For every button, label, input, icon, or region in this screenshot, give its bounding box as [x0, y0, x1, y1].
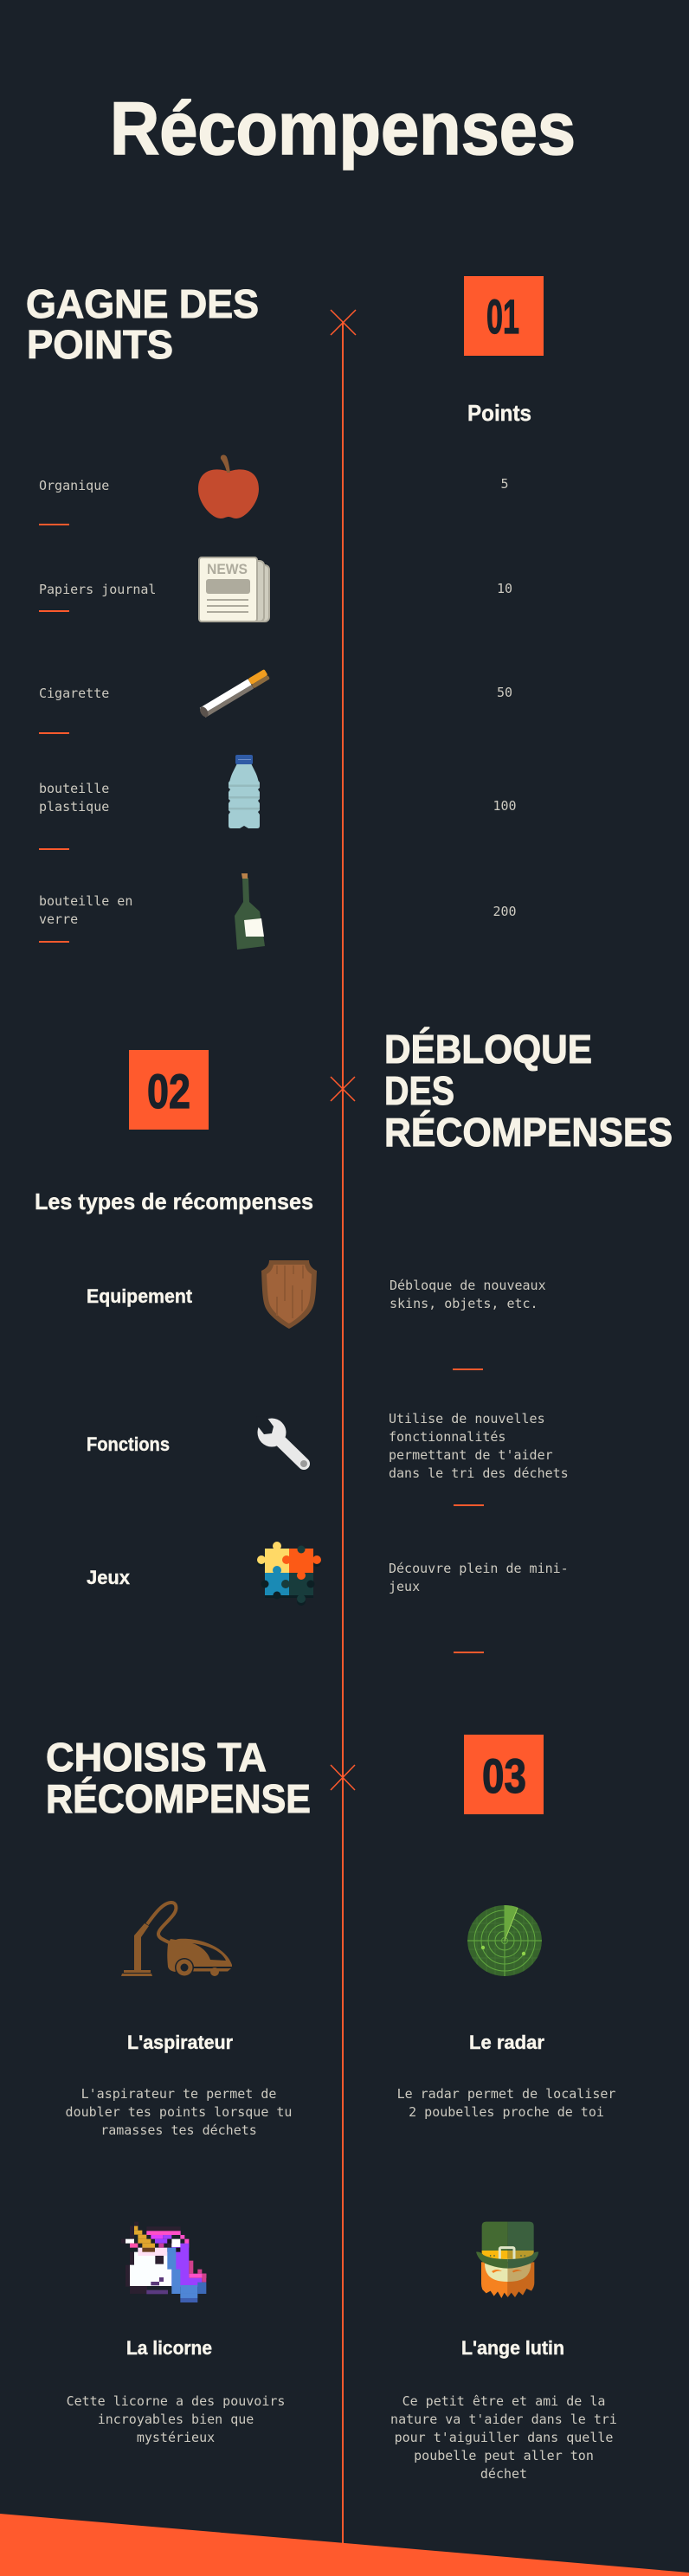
timeline line: [342, 322, 344, 2543]
icon: plastic bottle: [229, 755, 260, 828]
row: cigarette: Cigarette: [39, 686, 109, 701]
row: jeux: Découvre plein de mini-: [389, 1561, 569, 1576]
row: bouteille plastique: 100: [493, 798, 517, 814]
card text: aspirateur: L'aspirateur te permet de: [81, 2086, 276, 2102]
column heading: types de recompenses: Les types de récompenses: [35, 1188, 313, 1214]
number badge 03: [464, 1735, 544, 1814]
icon: glass bottle: [235, 873, 265, 950]
row: organique: 5: [500, 476, 509, 492]
row: fonctions: [87, 1411, 569, 1506]
bottom orange wedge: [0, 2514, 689, 2576]
card: ange lutin: [390, 2222, 617, 2482]
card text: radar: Le radar permet de localiser: [397, 2086, 615, 2102]
row: jeux: [87, 1542, 569, 1653]
row: equipement: [87, 1260, 546, 1370]
card: aspirateur: [66, 1903, 292, 2138]
row: jeux: jeux: [389, 1579, 420, 1594]
row: papiers journal: 10: [497, 581, 512, 596]
card text: radar: [397, 2086, 615, 2120]
row: organique: Organique: [39, 478, 109, 493]
panel: debloque des recompenses: [35, 1027, 673, 1653]
timeline cross 3: [331, 1765, 355, 1790]
card title: ange lutin: L'ange lutin: [461, 2337, 564, 2359]
heading: debloque des recompenses: RÉCOMPENSES: [384, 1110, 673, 1155]
row: fonctions: fonctionnalités: [389, 1429, 505, 1445]
icon: newspaper: [199, 557, 269, 621]
icon: radar: [467, 1905, 542, 1976]
heading: debloque des recompenses: DÉBLOQUE: [384, 1027, 592, 1072]
icon: vacuum cleaner: [121, 1903, 232, 1977]
card title: radar: Le radar: [469, 2032, 544, 2053]
panel: choisis ta recompense: [46, 1735, 617, 2482]
icon: puzzle: [257, 1542, 321, 1606]
card: radar: [397, 1905, 615, 2120]
row: bouteille en verre: bouteille en: [39, 893, 132, 909]
card text: licorne: Cette licorne a des pouvoirs: [67, 2393, 285, 2409]
row: bouteille plastique: bouteille: [39, 781, 109, 796]
row: cigarette: 50: [497, 685, 512, 700]
card text: ange lutin: [390, 2393, 617, 2482]
icon: newspaper: NEWS: [207, 561, 248, 577]
heading: gagne des points: GAGNE DES: [26, 281, 259, 326]
number badge 02: 02: [147, 1064, 190, 1118]
number badge 01: [464, 276, 544, 356]
card text: licorne: mystérieux: [137, 2430, 215, 2445]
row: bouteille plastique: plastique: [39, 799, 109, 815]
row: cigarette: [39, 669, 512, 734]
heading: gagne des points: [26, 281, 259, 367]
card text: ange lutin: pour t'aiguiller dans quelle: [395, 2430, 613, 2445]
heading: gagne des points: POINTS: [27, 322, 173, 367]
card title: licorne: La licorne: [126, 2337, 212, 2359]
icon: wrench: [256, 1416, 307, 1467]
timeline cross 2: [331, 1077, 355, 1101]
icon: cigarette: [198, 669, 270, 718]
row: fonctions: Fonctions: [87, 1433, 170, 1455]
timeline cross 1: [331, 310, 356, 335]
card text: ange lutin: nature va t'aider dans le tri: [390, 2412, 617, 2427]
icon: leprechaun: [476, 2222, 538, 2298]
row: papiers journal: [39, 557, 512, 621]
heading: debloque des recompenses: DES: [384, 1068, 454, 1113]
row: fonctions: Utilise de nouvelles: [389, 1411, 545, 1426]
card text: ange lutin: Ce petit être et ami de la: [402, 2393, 605, 2409]
number badge 01: 01: [486, 289, 519, 344]
card text: ange lutin: poubelle peut aller ton: [414, 2448, 594, 2463]
title: Récompenses: [110, 87, 576, 171]
row: equipement: Débloque de nouveaux: [390, 1278, 546, 1293]
card text: radar: 2 poubelles proche de toi: [409, 2104, 604, 2120]
column heading: points: Points: [467, 400, 531, 426]
number badge 03: 03: [482, 1748, 526, 1803]
row: equipement: Equipement: [87, 1285, 193, 1307]
row: bouteille plastique: [39, 755, 517, 850]
row: bouteille en verre: 200: [493, 904, 517, 919]
heading: debloque des recompenses: [384, 1027, 673, 1155]
panel: gagne des points: [26, 276, 544, 950]
row: bouteille en verre: [39, 873, 517, 950]
number badge 02: [129, 1050, 209, 1130]
row: papiers journal: Papiers journal: [39, 582, 156, 597]
icon: pixel unicorn: [121, 2222, 206, 2302]
row: jeux: Jeux: [87, 1567, 131, 1588]
card: licorne: [67, 2222, 285, 2445]
heading: choisis ta recompense: [46, 1735, 311, 1821]
row: fonctions: dans le tri des déchets: [389, 1465, 569, 1481]
row: organique: [39, 455, 509, 525]
icon: apple: [198, 455, 259, 518]
row: fonctions: permettant de t'aider: [389, 1447, 553, 1463]
card text: aspirateur: doubler tes points lorsque tu: [66, 2104, 292, 2120]
card text: licorne: [67, 2393, 285, 2445]
icon: wooden shield: [261, 1260, 317, 1329]
row: bouteille en verre: verre: [39, 911, 78, 927]
heading: choisis ta recompense: CHOISIS TA: [46, 1735, 267, 1780]
card text: aspirateur: [66, 2086, 292, 2138]
row: equipement: skins, objets, etc.: [390, 1296, 538, 1311]
card title: aspirateur: L'aspirateur: [127, 2032, 233, 2053]
card text: licorne: incroyables bien que: [98, 2412, 254, 2427]
card text: aspirateur: ramasses tes déchets: [100, 2122, 257, 2138]
card text: ange lutin: déchet: [480, 2466, 527, 2482]
heading: choisis ta recompense: RÉCOMPENSE: [46, 1776, 311, 1821]
